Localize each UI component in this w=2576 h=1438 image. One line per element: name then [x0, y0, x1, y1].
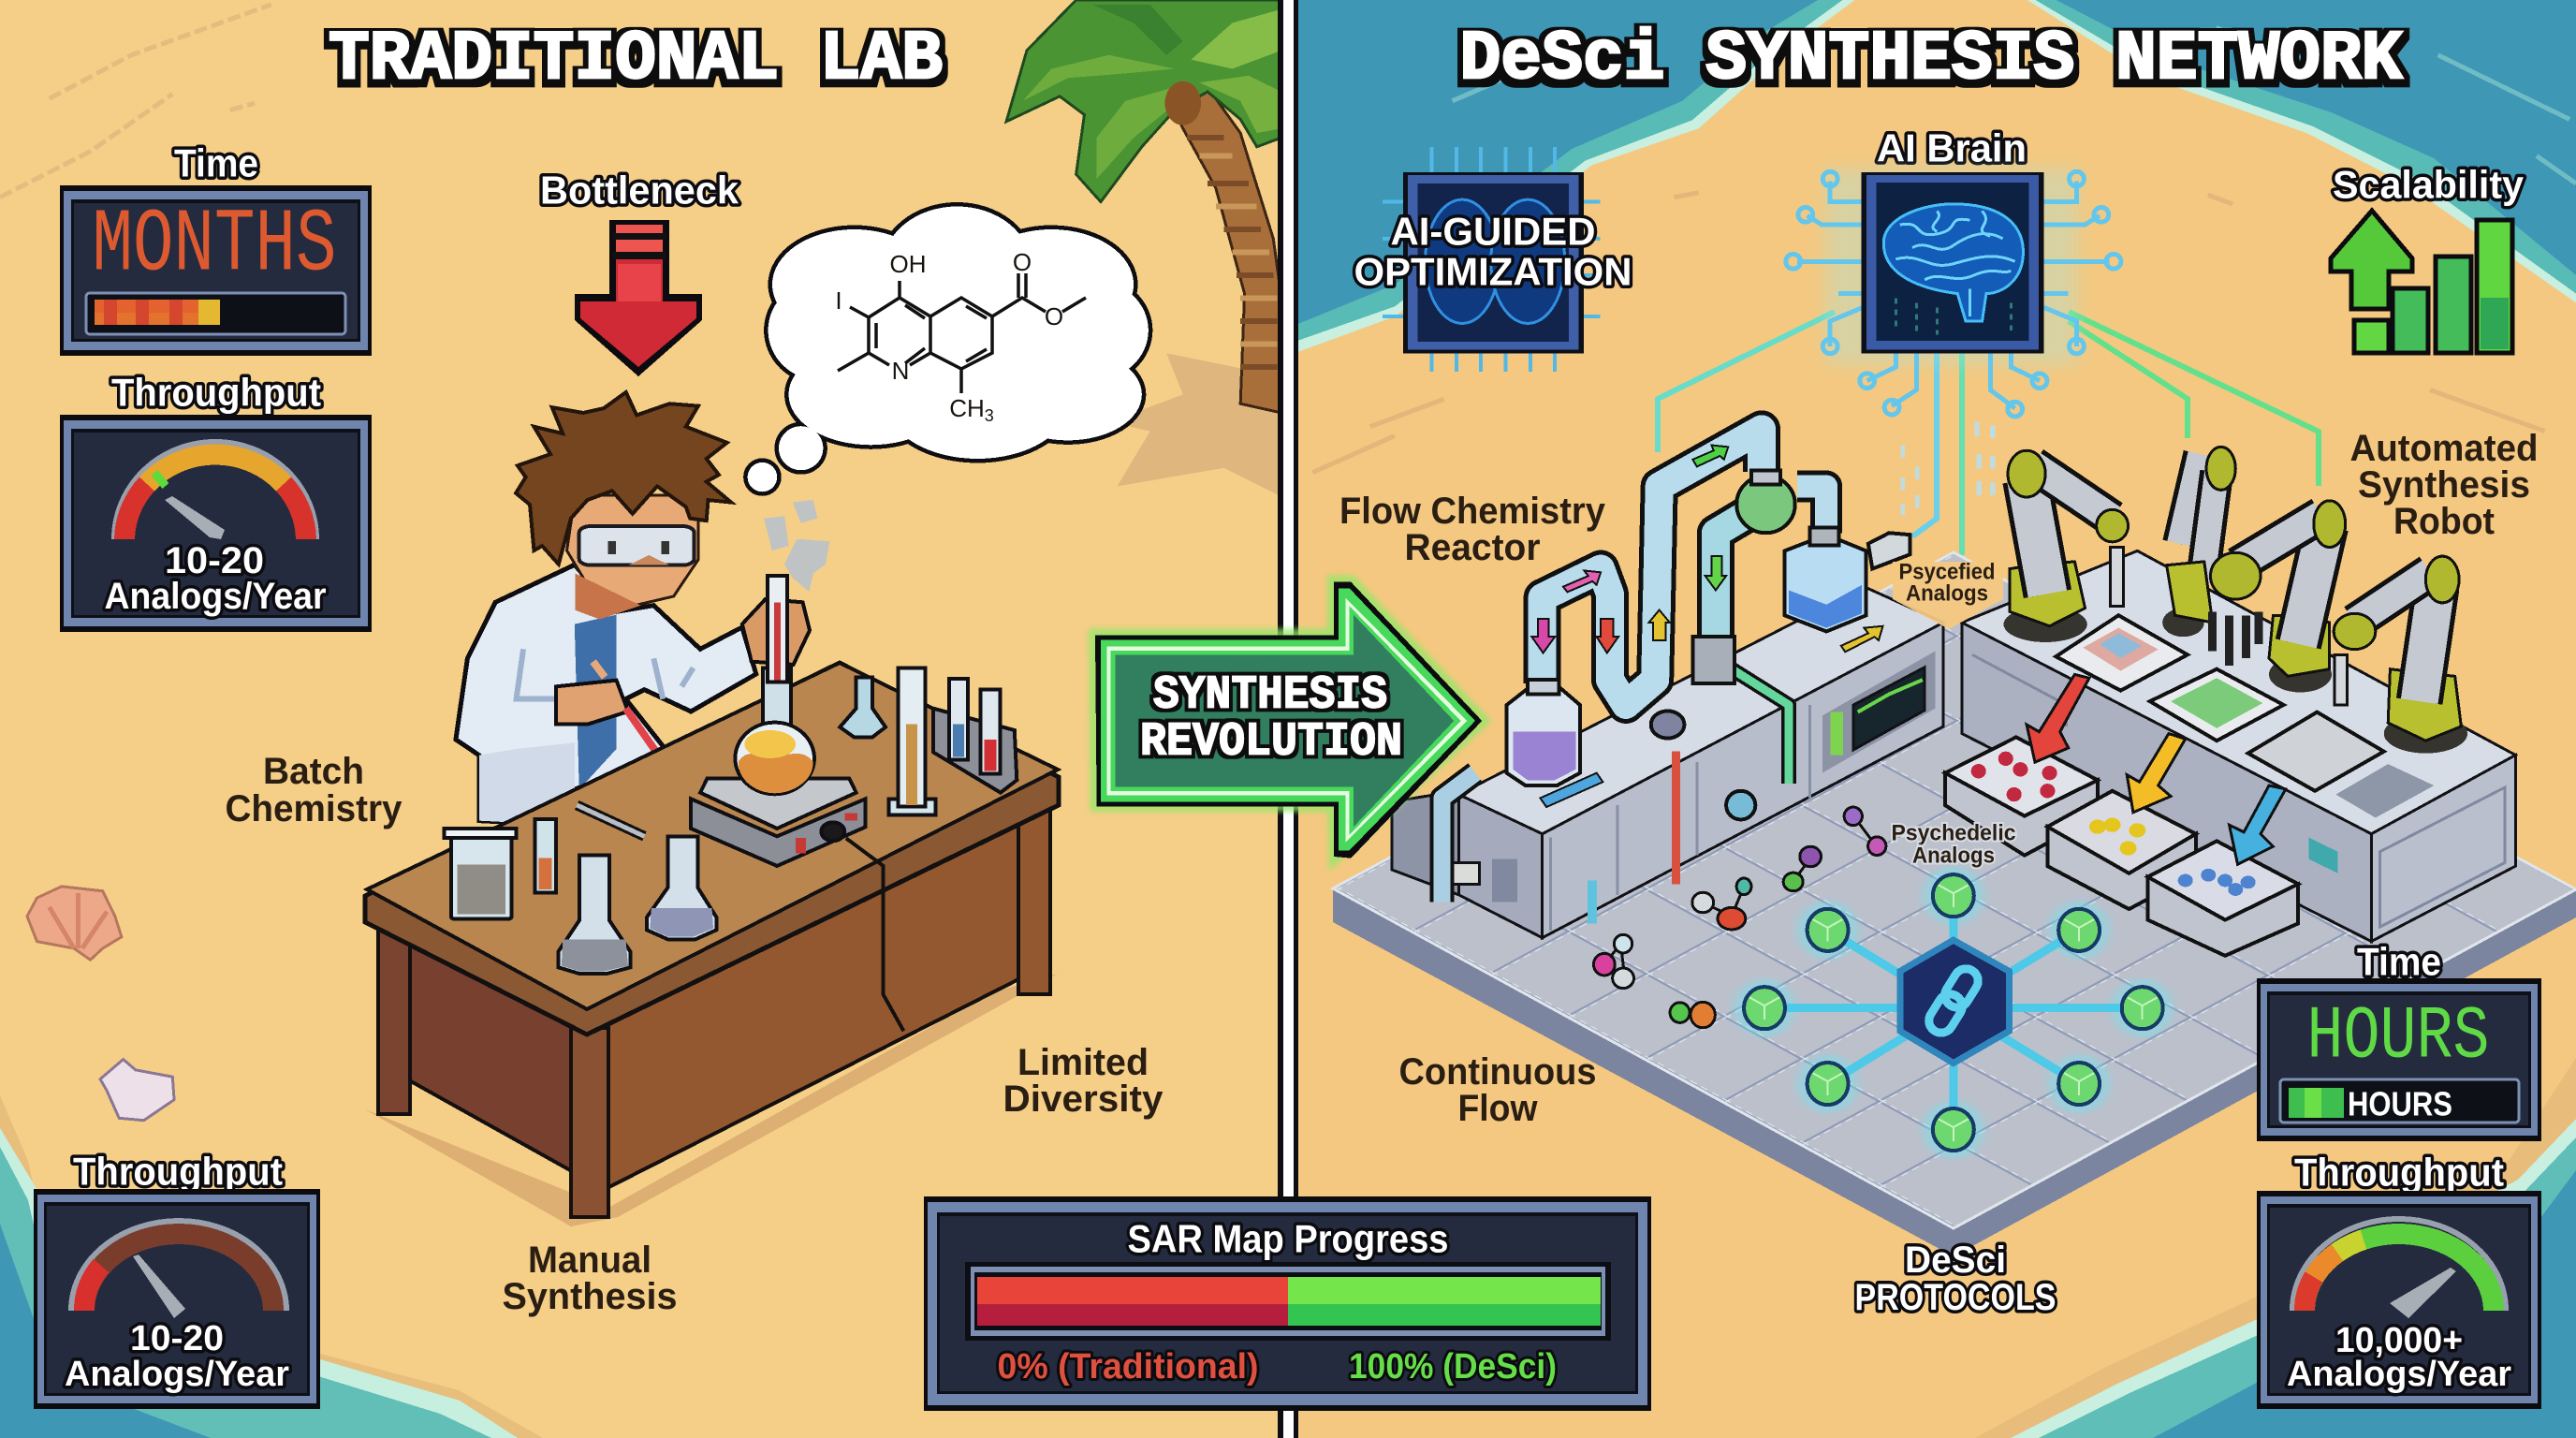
- molecule: [835, 248, 1086, 425]
- label: Throughput: [73, 1150, 283, 1193]
- item: graduated cylinder: [889, 668, 935, 815]
- label: bottleneck: Bottleneck: [540, 169, 739, 212]
- gauge: [2292, 1219, 2506, 1318]
- robot arm 4: [2334, 556, 2467, 754]
- robot arm 3: [2210, 501, 2346, 693]
- labels: batch chemistry: Chemistry: [225, 788, 402, 829]
- power cable: [846, 838, 903, 1031]
- labels: limited diversity: Diversity: [1003, 1078, 1164, 1120]
- isometric floor platform: [1333, 552, 2576, 1256]
- item: flask one: [558, 855, 630, 974]
- label: time: Time: [174, 140, 258, 185]
- scalability icon: [2331, 163, 2525, 353]
- bars: [2354, 220, 2512, 353]
- label: psycefied analogs: [1893, 560, 2003, 629]
- panel: throughput traditional bottom: [34, 1150, 320, 1409]
- lcd text months: MONTHS: [92, 195, 337, 296]
- value: 10,000+: [2335, 1321, 2463, 1360]
- item: hot plate: [691, 779, 866, 866]
- divider: [1278, 0, 1298, 1438]
- progress bar: [2280, 1079, 2519, 1123]
- label: psycefied analogs: Analogs: [1906, 580, 1988, 607]
- label: continuous flow: Flow: [1458, 1088, 1538, 1129]
- flow arrows: [1532, 445, 1882, 807]
- labels: batch chemistry: [225, 751, 402, 829]
- gauge: [114, 442, 316, 539]
- label: traditional: 0% (Traditional): [998, 1347, 1258, 1387]
- chip label: AI-GUIDED: [1391, 210, 1595, 253]
- label: desci protocols: PROTOCOLS: [1855, 1277, 2056, 1318]
- panel: time hours: [2257, 940, 2541, 1141]
- chip label: [1354, 210, 1632, 294]
- arrow up: [2331, 211, 2412, 309]
- panel: time months: [60, 140, 372, 356]
- label: Throughput: [2294, 1150, 2504, 1195]
- label: desci protocols: DeSci: [1905, 1240, 2006, 1281]
- robot arm 1: [2004, 450, 2129, 642]
- table top: [365, 663, 1059, 1034]
- frame: [2257, 1191, 2541, 1409]
- ai brain chip: [1786, 125, 2121, 417]
- label: psychedelic analogs: Analogs: [1912, 843, 1995, 869]
- floating molecules: [1593, 807, 1886, 1028]
- network nodes: [1744, 874, 2163, 1151]
- bottom right ocean: [1975, 1058, 2576, 1438]
- arrow text: [1140, 668, 1402, 770]
- chip body: [1862, 172, 2043, 353]
- arrow body: [1095, 582, 1482, 858]
- lab table: [365, 576, 1059, 1226]
- label: desci: 100% (DeSci): [1349, 1347, 1557, 1387]
- lab items: [445, 576, 1017, 974]
- hair: [516, 392, 731, 565]
- chip label: OPTIMIZATION: [1354, 249, 1632, 294]
- tray arrows: [2027, 674, 2286, 864]
- flow tubes: [1442, 429, 1826, 923]
- arrow text: SYNTHESIS: [1153, 668, 1387, 723]
- chip body: [1403, 172, 1584, 353]
- glow: [1825, 169, 2078, 365]
- palm shadow: [1109, 353, 1288, 500]
- chain link icon: [1925, 964, 1983, 1037]
- panel: sar map progress: [924, 1196, 1651, 1411]
- label: continuous flow: Continuous: [1398, 1051, 1597, 1093]
- labels: batch chemistry: Batch: [263, 751, 364, 792]
- label: continuous flow: [1398, 1051, 1597, 1129]
- title: SAR Map Progress: [1127, 1217, 1449, 1260]
- atom labels: O: [1013, 248, 1032, 276]
- unit: Analogs/Year: [65, 1355, 289, 1394]
- atom labels: N: [892, 357, 909, 385]
- left ocean corner: [0, 1095, 543, 1438]
- icon: bottleneck arrow: [575, 220, 702, 376]
- lab coat and torso: [456, 565, 810, 822]
- icon: shell lilac: [100, 1060, 174, 1121]
- right side ocean: [1288, 0, 2576, 1438]
- neck and face: [567, 495, 698, 620]
- label: AI Brain: [1877, 125, 2027, 170]
- panel: throughput traditional top: [60, 371, 372, 632]
- atom labels: 3: [985, 406, 994, 425]
- central hexagon: [1900, 940, 2010, 1064]
- atom labels: CH: [949, 394, 985, 422]
- panel frame: [60, 185, 372, 356]
- item: test tube rack: [933, 679, 1017, 793]
- progress bar: [965, 1262, 1611, 1341]
- label: Time: [2357, 940, 2441, 983]
- icon: shell orange: [27, 887, 122, 960]
- robot arm 2: [2162, 447, 2235, 637]
- sand streaks left: [0, 5, 271, 198]
- cloud shape: [748, 206, 1149, 492]
- desci protocol network: [1734, 867, 2172, 1158]
- label: flow chemistry reactor: Reactor: [1404, 527, 1541, 568]
- table legs and faces: [378, 805, 1050, 1217]
- labels: manual synthesis: Synthesis: [502, 1276, 678, 1317]
- lcd text hours: HOURS: [2306, 994, 2490, 1080]
- flow chemistry reactor: [1392, 429, 1943, 938]
- title: desci network: DeSci SYNTHESIS NETWORK: [1460, 21, 2403, 99]
- network links: [1764, 896, 2143, 1130]
- vessels: [1507, 470, 1910, 819]
- gauge: [71, 1221, 286, 1318]
- frame: [924, 1196, 1651, 1411]
- monitor: [1822, 652, 1935, 773]
- item: stirring rod: [577, 805, 644, 836]
- item: flask two: [647, 836, 716, 939]
- progress bar: HOURS: [2348, 1084, 2452, 1123]
- network glow: [1734, 867, 2172, 1158]
- atom labels: [835, 248, 1063, 425]
- progress bar: [86, 293, 345, 334]
- arrow: synthesis revolution: [1095, 582, 1482, 858]
- unit: Analogs/Year: [2287, 1355, 2511, 1394]
- label: automated synthesis robot: Automated: [2349, 428, 2539, 469]
- labels: limited diversity: Limited: [1017, 1042, 1149, 1083]
- palm tree: [1006, 0, 1281, 413]
- fronds mass: [1006, 0, 1281, 202]
- label: desci protocols: [1855, 1240, 2056, 1318]
- labels: manual synthesis: [502, 1240, 678, 1317]
- atom labels: O: [1045, 302, 1063, 330]
- value: 10-20: [130, 1319, 224, 1358]
- atom labels: I: [835, 286, 842, 315]
- table shadow: [365, 974, 1058, 1226]
- unit: Analogs/Year: [105, 576, 326, 617]
- item: test tube: [534, 819, 556, 892]
- frond highlights: [1023, 55, 1175, 101]
- item: small flask: [840, 677, 886, 737]
- frame: [2257, 978, 2541, 1141]
- thought cloud with molecule: [748, 206, 1149, 492]
- frame: [60, 415, 372, 632]
- steam: [764, 500, 829, 592]
- item: beaker: [445, 829, 517, 919]
- label: flow chemistry reactor: [1339, 491, 1606, 568]
- labels: manual synthesis: Manual: [528, 1240, 651, 1281]
- arrow glow: [1095, 582, 1482, 857]
- label: throughput: Throughput: [111, 371, 321, 414]
- item: round flask: [735, 668, 814, 794]
- frame: [34, 1189, 320, 1409]
- analog trays: [1945, 737, 2298, 956]
- labels: limited diversity: [1003, 1042, 1164, 1120]
- label: psycefied analogs: Psycefied: [1898, 560, 1996, 584]
- machine base: [1392, 587, 1943, 938]
- value: 10-20: 10-20: [165, 540, 264, 581]
- label: automated synthesis robot: Robot: [2393, 501, 2495, 542]
- label: automated synthesis robot: Synthesis: [2358, 464, 2530, 506]
- panel: throughput desci: [2257, 1150, 2541, 1409]
- trunk: [1163, 87, 1281, 413]
- chip: ai-guided optimization: [1354, 147, 1632, 372]
- sample plates: [2056, 615, 2384, 791]
- background: left sand: [0, 0, 1288, 1438]
- atom labels: OH: [889, 250, 927, 278]
- chip pins: [1383, 147, 1600, 372]
- brain icon: [1883, 204, 2023, 335]
- label: psychedelic analogs: Psychedelic: [1891, 820, 2016, 846]
- label: automated synthesis robot: [2349, 428, 2539, 542]
- traces: [1786, 171, 2121, 417]
- circuit wires: [1658, 312, 2319, 555]
- automated synthesis robots: [1945, 447, 2515, 956]
- item: thermometer: [768, 576, 787, 682]
- goggles: [579, 526, 695, 565]
- scientist: [456, 392, 829, 822]
- title: traditional lab: TRADITIONAL LAB: [329, 21, 943, 99]
- robot arms: [2004, 447, 2467, 754]
- data stream dots: [1901, 422, 1996, 515]
- label: psychedelic analogs: [1891, 820, 2016, 869]
- arrow text: REVOLUTION: [1140, 715, 1402, 770]
- bench: [1962, 550, 2515, 942]
- label: Scalability: [2333, 163, 2525, 206]
- label: flow chemistry reactor: Flow Chemistry: [1339, 491, 1606, 532]
